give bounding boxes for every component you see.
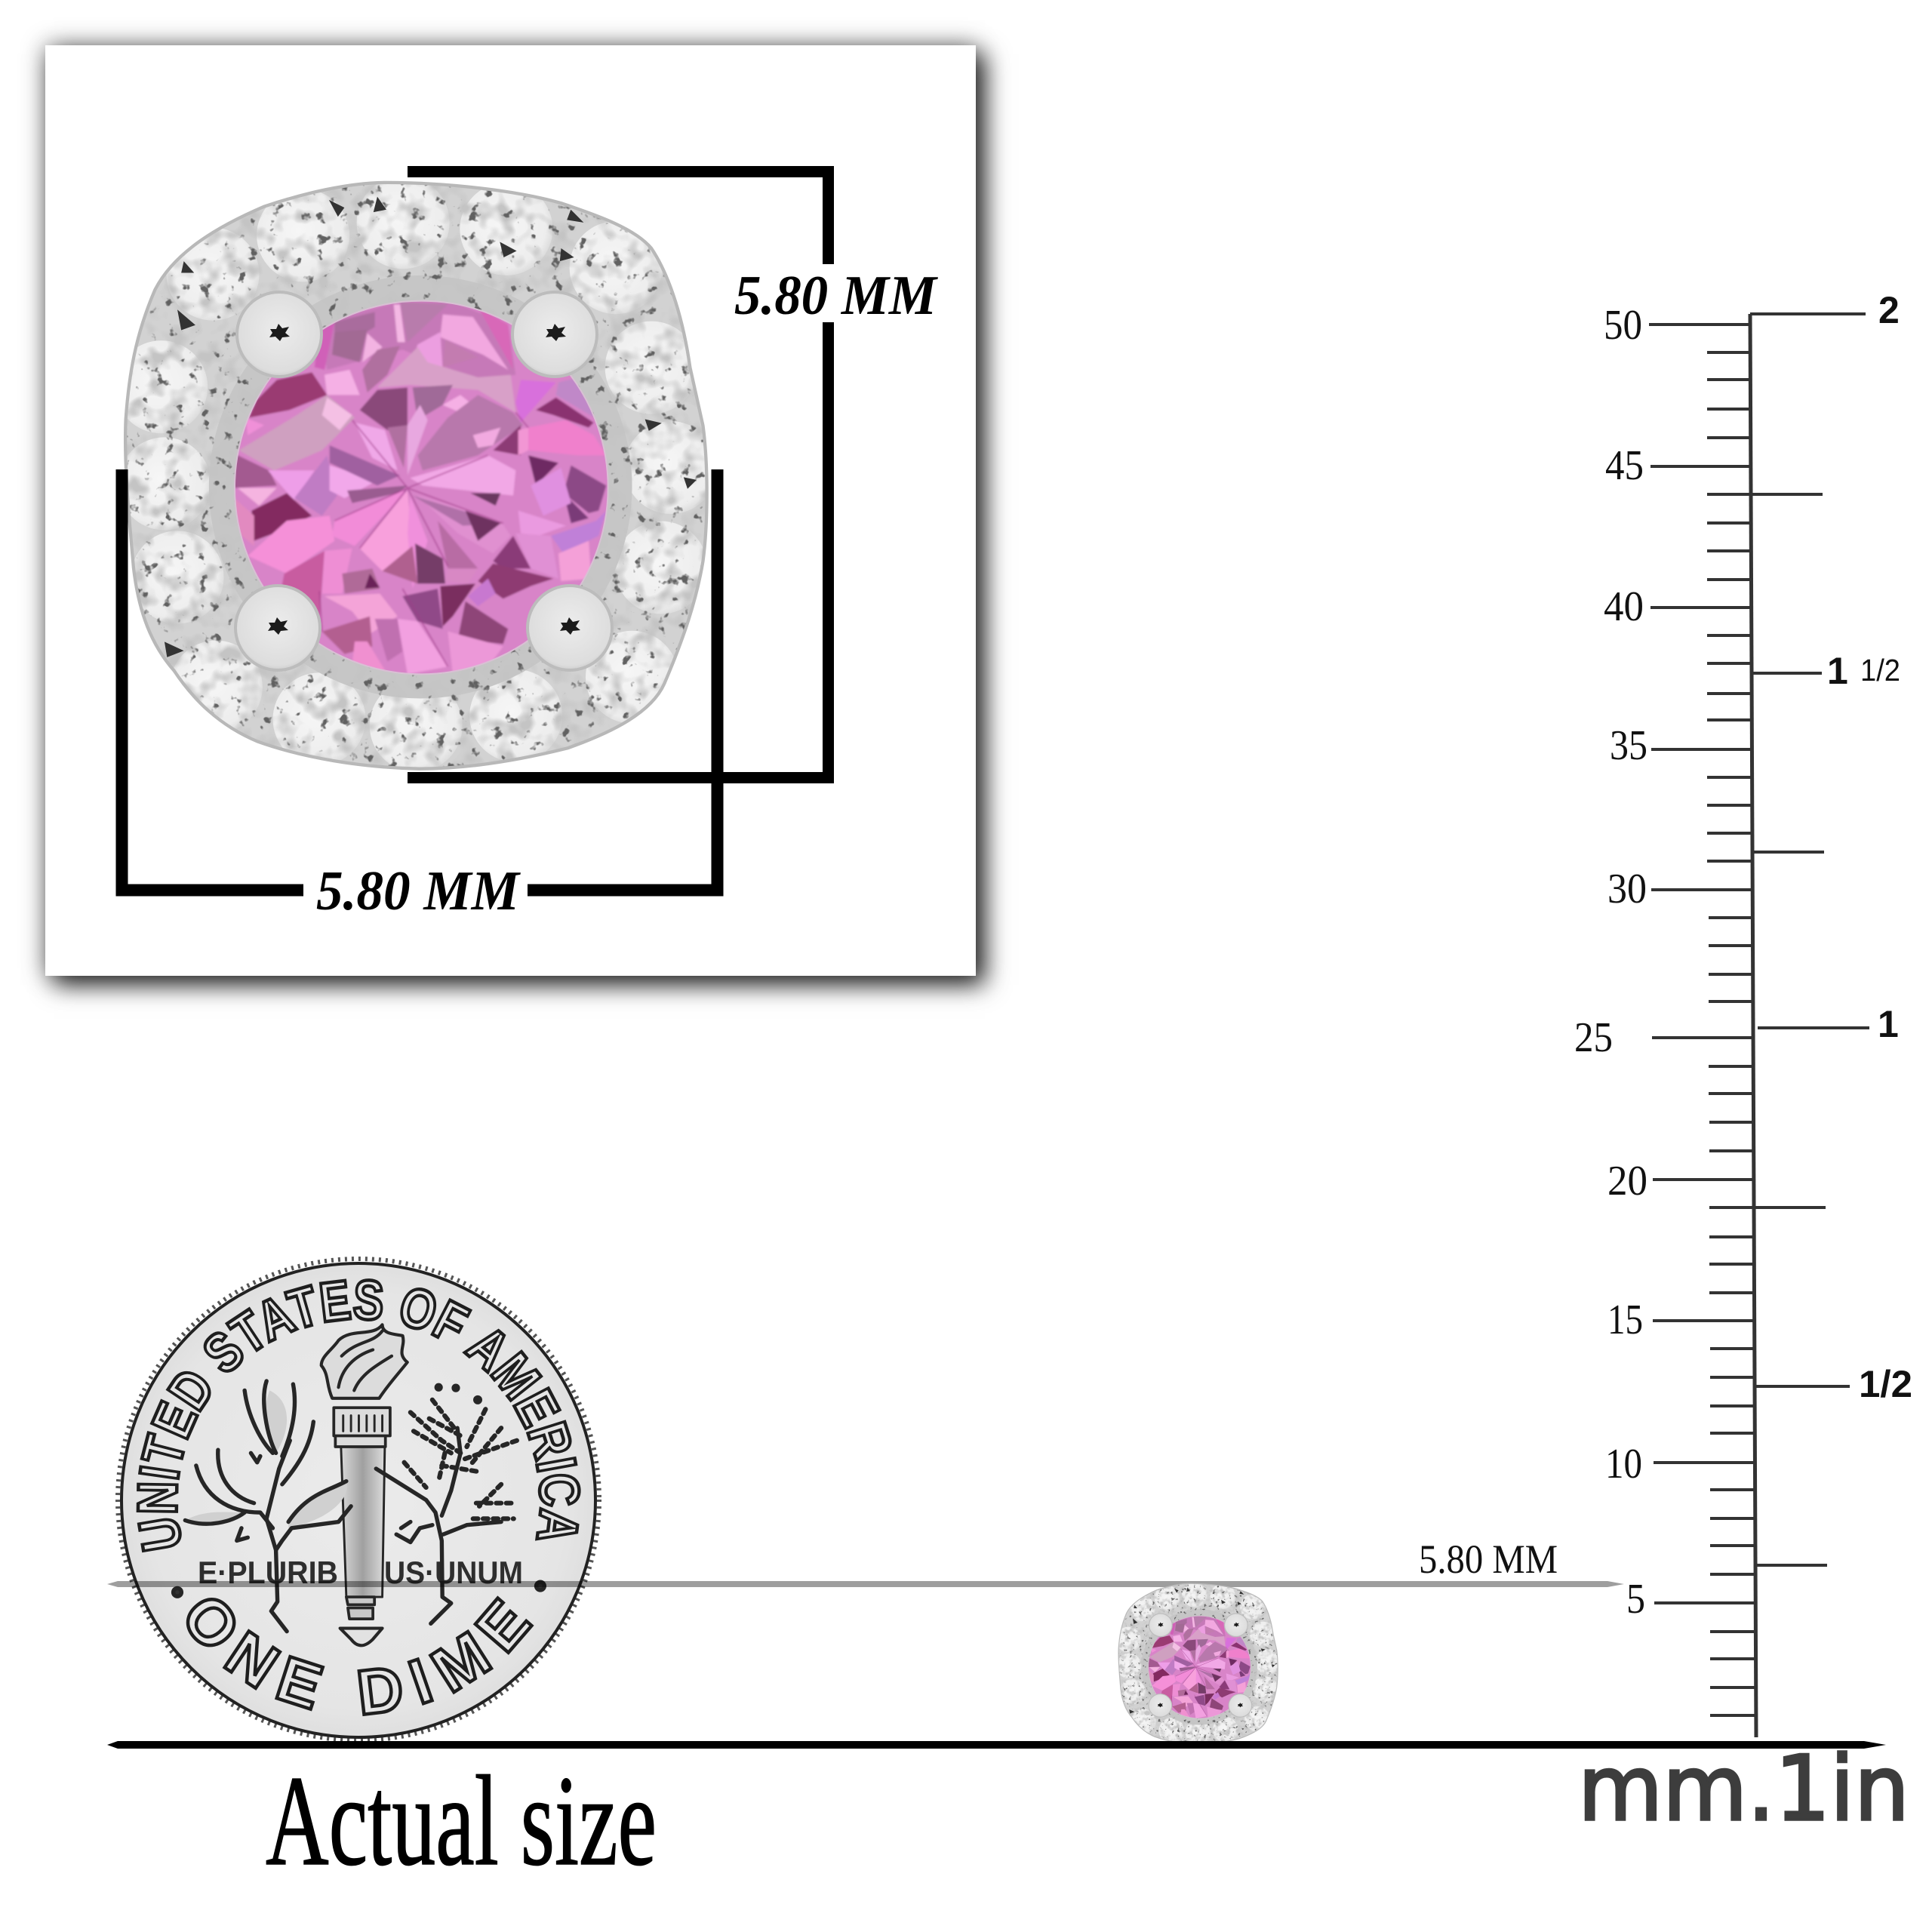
coin motto right: US·UNUM xyxy=(384,1555,523,1590)
millimetre label 40: 40 xyxy=(1604,583,1644,630)
dimension bracket: width xyxy=(122,469,717,891)
heading: mm and inch units: mm.1in xyxy=(1578,1737,1909,1841)
panel: enlarged earring card xyxy=(45,45,976,976)
ruler xyxy=(1574,289,1912,1737)
coin artwork: torch and branches xyxy=(174,1324,544,1645)
ruler inch ticks xyxy=(1750,314,1869,1565)
coin legend: ONE DIME: ONE DIME xyxy=(186,1595,534,1716)
inch label 1/2: 1/2 xyxy=(1859,1363,1912,1405)
prong: bottom right xyxy=(526,584,614,672)
millimetre label 5: 5 xyxy=(1626,1576,1645,1623)
millimetre label 30: 30 xyxy=(1607,866,1647,912)
grey measuring line xyxy=(107,1581,1624,1587)
coin motto left: E·PLURIB xyxy=(198,1555,338,1590)
pink sapphire stone xyxy=(226,294,619,687)
prong: top left xyxy=(235,291,323,378)
dime coin xyxy=(115,1257,601,1741)
millimetre label 35: 35 xyxy=(1610,722,1647,769)
jewel: enlarged pink sapphire halo earring xyxy=(115,174,717,777)
millimetre label 20: 20 xyxy=(1607,1158,1647,1204)
baseline rule xyxy=(107,1741,1886,1749)
ruler millimetre major ticks xyxy=(1649,325,1756,1603)
heading: Actual size: Actual size xyxy=(266,1749,657,1892)
jewel: earring at actual size xyxy=(1115,1581,1281,1746)
inch label 2: 2 xyxy=(1878,289,1900,331)
halo: diamond setting xyxy=(115,174,717,777)
inch label 1 1/2 xyxy=(1827,650,1900,692)
coin legend: UNITED STATES OF AMERICA: UNITED STATES OF AMERICA xyxy=(136,1278,581,1553)
millimetre label 15: 15 xyxy=(1607,1297,1643,1343)
ruler axis xyxy=(1750,314,1756,1737)
label: height 5.80 MM: 5.80 MM xyxy=(734,265,938,327)
dimension bracket: height xyxy=(408,172,829,777)
label: width 5.80 MM: 5.80 MM xyxy=(316,860,521,922)
millimetre label 25: 25 xyxy=(1574,1014,1613,1061)
inch label 1: 1 xyxy=(1878,1003,1899,1045)
millimetre label 10: 10 xyxy=(1605,1441,1642,1487)
millimetre label 45: 45 xyxy=(1605,442,1644,489)
inch label 1 1/2: 1/2 xyxy=(1860,653,1900,688)
ruler minor ticks xyxy=(1707,352,1756,1715)
prong: bottom left xyxy=(234,584,321,672)
millimetre label 50: 50 xyxy=(1604,302,1642,349)
inch label 1 1/2: 1 xyxy=(1827,650,1848,692)
label: actual width 5.80 MM: 5.80 MM xyxy=(1419,1537,1558,1582)
prong: top right xyxy=(511,291,598,378)
